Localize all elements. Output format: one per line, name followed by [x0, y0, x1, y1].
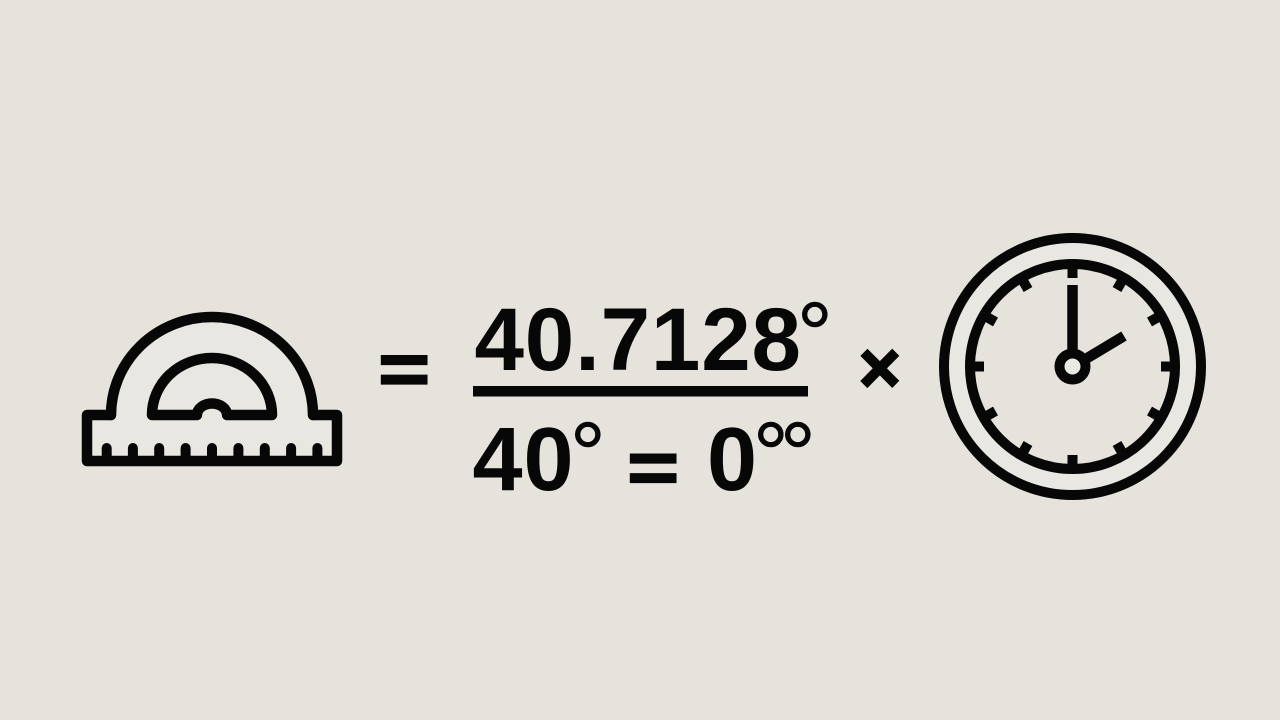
equals sign: = [378, 329, 430, 410]
denominator zero with marks: 0 [707, 410, 757, 510]
icon: clock [944, 238, 1201, 495]
numerator: ° [797, 284, 833, 384]
multiplication sign: × [859, 328, 901, 408]
clock hands [1072, 285, 1124, 360]
denominator zero with marks: ° [780, 404, 816, 504]
clock hub [1060, 354, 1086, 380]
icon: protractor [87, 317, 337, 461]
denominator: 40 [472, 410, 575, 510]
denominator zero with marks: ° [753, 404, 789, 504]
fraction [472, 284, 833, 510]
denominator equals: = [628, 428, 679, 509]
denominator: ° [570, 404, 606, 504]
numerator: 40.7128 [474, 289, 802, 389]
fraction bar [473, 386, 808, 396]
